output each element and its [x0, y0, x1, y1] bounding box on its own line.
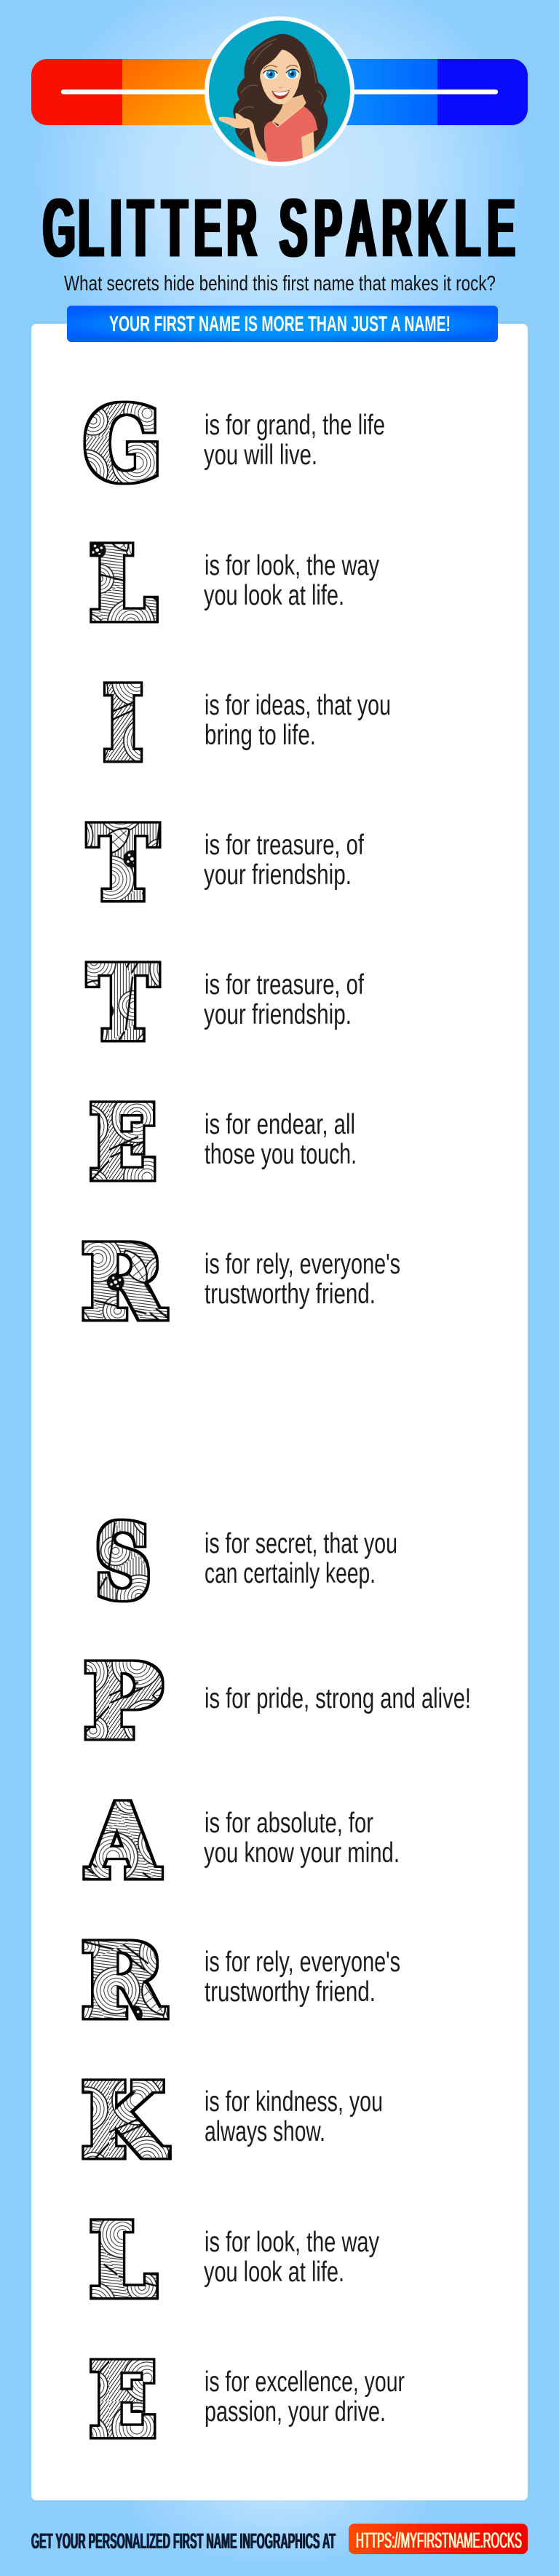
row: T is for treasure: your friendship.: [204, 859, 352, 891]
row: L is for look (second): you look at life.: [204, 2257, 344, 2288]
row: G is for grand: G: [84, 386, 162, 503]
row: P is for pride: is for pride, strong and alive!: [205, 1683, 471, 1714]
title: GLITTER SPARKLE: [43, 182, 515, 275]
row: E is for excellence: E: [90, 2342, 156, 2459]
row: K is for kindness: is for kindness, you: [205, 2086, 383, 2118]
header ribbon bar: [31, 59, 528, 125]
row: E is for endear: is for endear, all: [205, 1109, 355, 1140]
panel: white card: [31, 324, 528, 2500]
row: E is for endear: E: [90, 1085, 156, 1201]
row: R is for rely (second): trustworthy friend.: [205, 1976, 376, 2008]
row: A is for absolute: A: [87, 1784, 160, 1900]
banner: [67, 306, 498, 342]
row: L is for look (second): L: [90, 2203, 156, 2319]
row: T is for treasure (second): is for treasure, of: [205, 969, 364, 1001]
row: R is for rely: R: [82, 1225, 164, 1341]
row: S is for secret: [96, 1504, 397, 1621]
row: L is for look: [90, 526, 379, 643]
row: T is for treasure (second): [89, 945, 364, 1062]
row: R is for rely (second): is for rely, everyone's: [205, 1947, 400, 1978]
row: L is for look: L: [90, 526, 156, 643]
avatar: cartoon woman in circle: [205, 16, 354, 166]
row: E is for endear: those you touch.: [205, 1139, 357, 1170]
row: R is for rely (second): [82, 1923, 400, 2040]
row: E is for excellence: is for excellence, your: [205, 2366, 405, 2398]
row: S is for secret: can certainly keep.: [205, 1558, 376, 1589]
row: L is for look: you look at life.: [204, 580, 344, 611]
row: T is for treasure: is for treasure, of: [205, 830, 364, 861]
row: L is for look: is for look, the way: [205, 550, 379, 581]
row: I is for ideas: [103, 666, 391, 782]
row: K is for kindness: [82, 2063, 383, 2179]
row: T is for treasure (second): T: [89, 945, 157, 1062]
row: P is for pride: [84, 1644, 471, 1760]
row: G is for grand: you will live.: [204, 440, 317, 471]
row: T is for treasure: T: [89, 806, 157, 922]
row: R is for rely (second): R: [82, 1923, 164, 2040]
row: I is for ideas: bring to life.: [205, 720, 316, 751]
row: K is for kindness: K: [82, 2063, 167, 2179]
row: L is for look (second): is for look, the way: [205, 2227, 379, 2258]
row: I is for ideas: I: [103, 666, 143, 782]
footer url button: [349, 2524, 528, 2554]
row: A is for absolute: you know your mind.: [204, 1837, 400, 1869]
row: T is for treasure: [89, 806, 364, 922]
row: E is for endear: [90, 1085, 357, 1201]
row: A is for absolute: is for absolute, for: [205, 1808, 373, 1839]
row: R is for rely: is for rely, everyone's: [205, 1249, 400, 1280]
row: I is for ideas: is for ideas, that you: [205, 690, 391, 721]
row: K is for kindness: always show.: [205, 2116, 325, 2147]
row: S is for secret: S: [96, 1504, 150, 1621]
row: P is for pride: P: [84, 1644, 162, 1760]
row: R is for rely: [82, 1225, 400, 1341]
row: E is for excellence: passion, your drive.: [205, 2396, 386, 2428]
row: A is for absolute: [87, 1784, 400, 1900]
row: G is for grand: [84, 386, 385, 503]
row: L is for look (second): [90, 2203, 379, 2319]
row: G is for grand: is for grand, the life: [205, 410, 385, 441]
row: E is for excellence: [90, 2342, 405, 2459]
row: R is for rely: trustworthy friend.: [205, 1279, 376, 1310]
row: T is for treasure (second): your friendship.: [204, 999, 352, 1030]
row: S is for secret: is for secret, that you: [205, 1528, 397, 1559]
